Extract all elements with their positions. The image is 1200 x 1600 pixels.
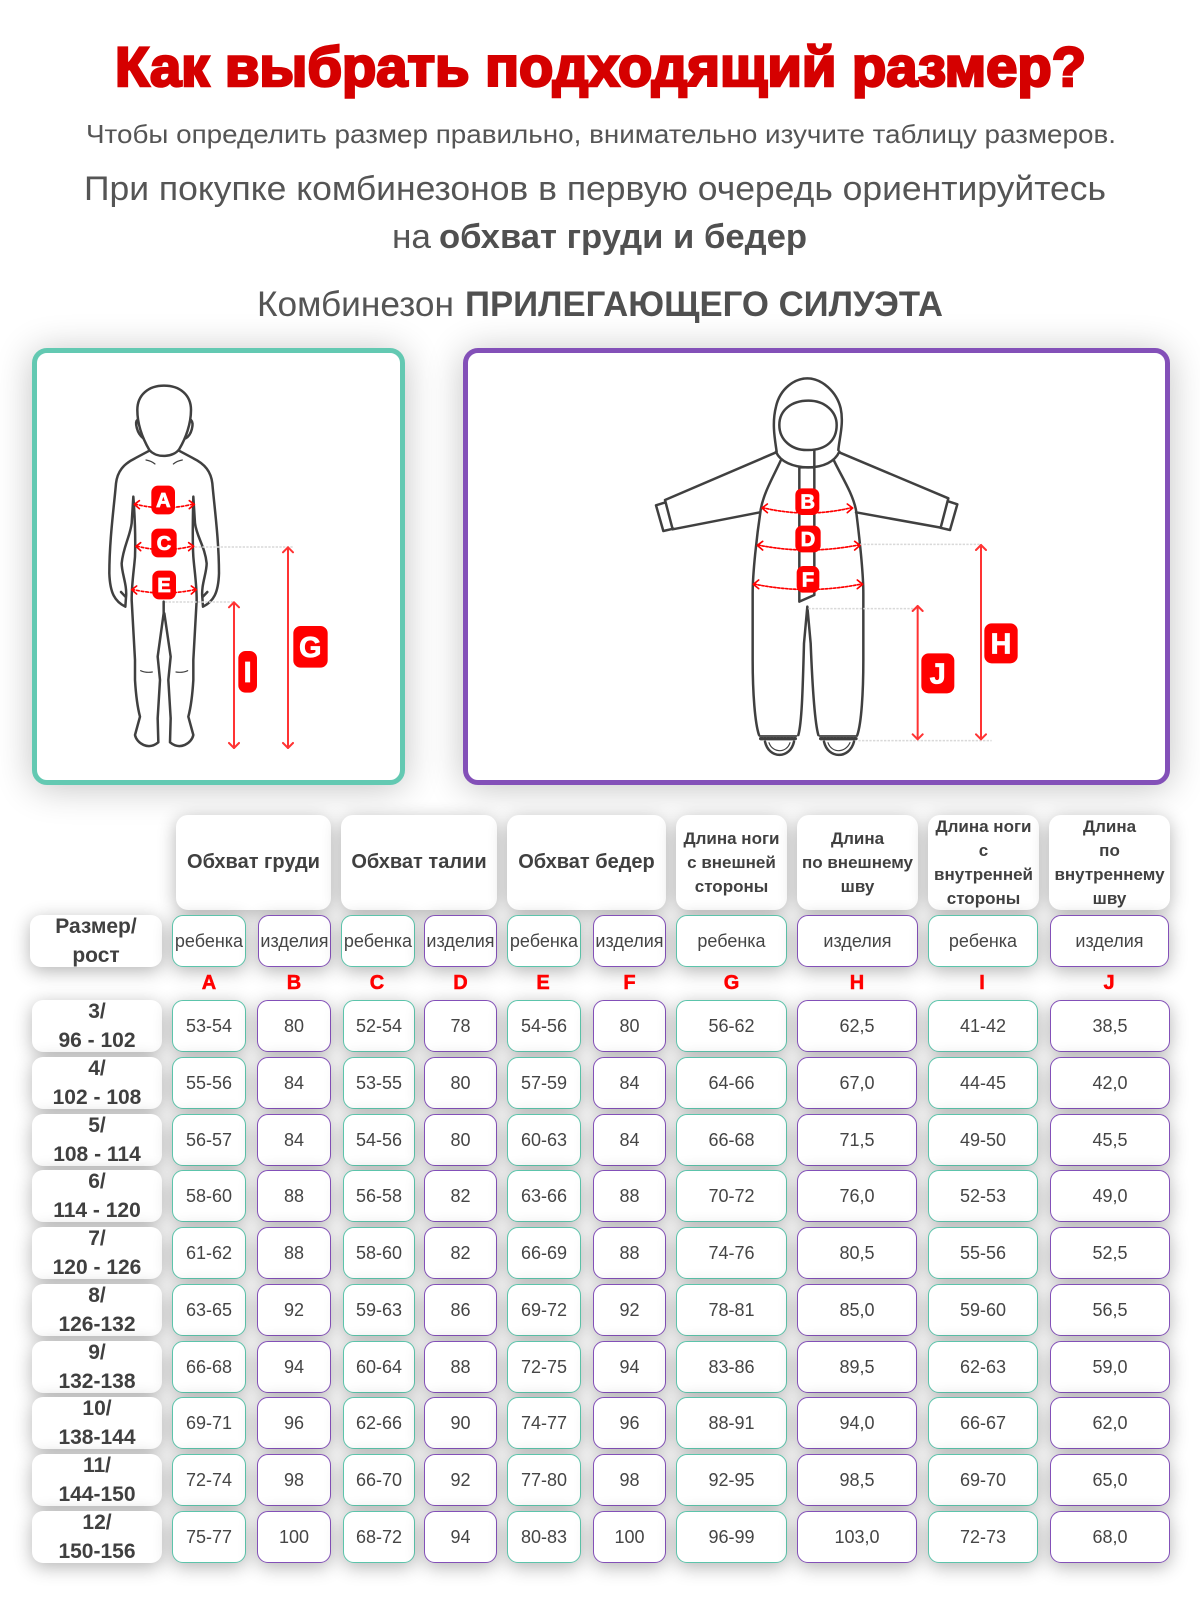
row: size 5: 84 <box>284 1130 304 1150</box>
row: size 5 <box>22 1108 1180 1563</box>
section heading: Комбинезон <box>257 285 454 324</box>
row: child / garment subheaders: изделия <box>595 930 664 950</box>
badge: E: E <box>157 575 171 597</box>
badge: I: I <box>244 657 252 689</box>
row: size 7: 58-60 <box>356 1242 402 1262</box>
badge: H <box>984 623 1018 663</box>
panel: jumpsuit garment measurements <box>463 348 1170 785</box>
row: size 10: 10/ <box>82 1397 112 1420</box>
header: leg length inner side: Длина ноги <box>936 816 1032 836</box>
row: child / garment subheaders: изделия <box>823 930 892 950</box>
badge: B <box>795 488 819 515</box>
row: size 10: 88-91 <box>708 1412 755 1432</box>
badge: A: A <box>156 490 171 512</box>
row: child / garment subheaders: ребенка <box>510 930 578 950</box>
row: size 8: 59-63 <box>356 1300 402 1320</box>
arrows: chest, waist, hip girth <box>753 504 863 589</box>
row: size 10: 62,0 <box>1092 1412 1128 1432</box>
badge: D <box>795 526 821 552</box>
row: size 8: 86 <box>450 1300 471 1320</box>
row: size 4: 102 - 108 <box>53 1086 141 1109</box>
row: size 6: 58-60 <box>186 1186 232 1206</box>
row: size 11: 98,5 <box>839 1470 875 1490</box>
row: size 10: 96 <box>619 1412 640 1432</box>
row: column letters: J <box>1103 972 1115 994</box>
row: size 8 <box>22 1278 1180 1563</box>
row: size 4 <box>22 1050 1180 1563</box>
row: size 9: 88 <box>450 1356 471 1376</box>
row: size 7: 61-62 <box>186 1242 232 1262</box>
icon: child body outline <box>109 386 219 746</box>
badge: I <box>238 651 257 693</box>
row: size 9: 9/ <box>88 1341 106 1364</box>
row: size 4: 84 <box>619 1072 640 1092</box>
row: size 11: 98 <box>284 1470 304 1490</box>
row: size 6: 88 <box>619 1186 640 1206</box>
row: size 7: 55-56 <box>960 1242 1006 1262</box>
badge: D: D <box>801 529 815 551</box>
icon: hooded jumpsuit outline <box>656 378 957 755</box>
arrow: measure H <box>976 545 986 739</box>
badge: E <box>152 571 176 599</box>
row: size 11: 144-150 <box>58 1483 136 1506</box>
row: size 5: 66-68 <box>708 1130 755 1150</box>
row: size 3 <box>22 994 1180 1563</box>
row: child / garment subheaders: изделия <box>260 930 329 950</box>
row: size 7: 52,5 <box>1092 1242 1128 1262</box>
row: size 8: 69-72 <box>521 1300 567 1320</box>
row: size 5: 60-63 <box>521 1130 567 1150</box>
row: size 4: 84 <box>284 1072 304 1092</box>
row: size 5: 56-57 <box>186 1130 232 1150</box>
row: size 10: 66-67 <box>960 1412 1006 1432</box>
row: size 5: 84 <box>619 1130 640 1150</box>
section heading <box>257 285 943 324</box>
row: child / garment subheaders: изделия <box>1075 930 1144 950</box>
row: size 5: 71,5 <box>839 1130 875 1150</box>
advice line 2: на <box>392 218 431 256</box>
header: chest girth: Обхват груди <box>187 851 320 873</box>
row: size 9 <box>22 1334 1180 1563</box>
header: outer seam length: по внешнему <box>802 852 913 872</box>
row: size 9: 60-64 <box>356 1356 402 1376</box>
row: size 6: 88 <box>284 1186 304 1206</box>
row: size 6: 114 - 120 <box>53 1199 141 1222</box>
header: leg length inner side: с <box>979 840 988 860</box>
row: size 10 <box>22 1390 1180 1563</box>
row: size 4: 57-59 <box>521 1072 567 1092</box>
row: size 9: 89,5 <box>839 1356 875 1376</box>
row: size 8: 59-60 <box>960 1300 1006 1320</box>
header: leg length outer side <box>676 815 787 910</box>
header: leg length inner side <box>928 815 1039 910</box>
row: size 4: 67,0 <box>839 1072 875 1092</box>
header: hip girth <box>507 815 666 910</box>
row: size 4: 55-56 <box>186 1072 232 1092</box>
row: size 8: 85,0 <box>839 1300 875 1320</box>
title: Как выбрать подходящий размер? <box>115 35 1086 98</box>
row: size 4: 53-55 <box>356 1072 402 1092</box>
row: size 11: 65,0 <box>1092 1470 1128 1490</box>
row: size 3: 80 <box>284 1016 304 1036</box>
row: size 4: 4/ <box>88 1057 106 1080</box>
row: size 9: 62-63 <box>960 1356 1006 1376</box>
row: child / garment subheaders: ребенка <box>175 930 243 950</box>
row: size 5: 80 <box>450 1130 471 1150</box>
guide lines: dotted levels <box>165 547 293 602</box>
table: size chart <box>20 808 1180 1578</box>
badge: J: J <box>930 659 946 691</box>
panel: child body measurements <box>32 348 405 785</box>
row: size 4: 44-45 <box>960 1072 1006 1092</box>
row: column letters: I <box>979 972 985 994</box>
row: size 9: 132-138 <box>58 1370 136 1393</box>
row: size 5: 54-56 <box>356 1130 402 1150</box>
row: size 11 <box>22 1448 1180 1563</box>
row: size 5: 5/ <box>88 1114 106 1137</box>
row: column letters: A <box>202 972 216 994</box>
row: size 3: 53-54 <box>186 1016 232 1036</box>
row: size 3: 54-56 <box>521 1016 567 1036</box>
badge: B: B <box>800 492 815 514</box>
row: size 9: 94 <box>619 1356 640 1376</box>
header: leg length outer side: с внешней <box>687 852 776 872</box>
row: size 12: 68,0 <box>1092 1526 1128 1546</box>
header: inner seam length: Длина <box>1083 816 1136 836</box>
row: size 7: 88 <box>619 1242 640 1262</box>
intro line: Чтобы определить размер правильно, внимательно изучите таблицу размеров. <box>86 119 1116 149</box>
row: column letters: B <box>287 972 301 994</box>
header: chest girth <box>176 815 331 910</box>
row: size 6: 56-58 <box>356 1186 402 1206</box>
row: size 12: 68-72 <box>356 1526 402 1546</box>
row: size 11: 11/ <box>83 1454 111 1477</box>
row: size 12: 150-156 <box>58 1540 136 1563</box>
row: size 3: 56-62 <box>708 1016 755 1036</box>
badge: G: G <box>299 632 321 664</box>
badge: A <box>151 486 175 514</box>
row: column letters: E <box>536 972 550 994</box>
row: child / garment subheaders: рост <box>72 944 120 967</box>
row: size 7: 80,5 <box>839 1242 875 1262</box>
row: size 8: 56,5 <box>1092 1300 1128 1320</box>
row: size 12: 75-77 <box>186 1526 232 1546</box>
row: size 10: 94,0 <box>839 1412 875 1432</box>
header: leg length outer side: Длина ноги <box>684 828 780 848</box>
row: size 7: 7/ <box>88 1227 106 1250</box>
row: size 4: 80 <box>450 1072 471 1092</box>
row: size 7: 82 <box>450 1242 471 1262</box>
row: child / garment subheaders: ребенка <box>949 930 1017 950</box>
row: child / garment subheaders <box>20 908 1180 1563</box>
heading block <box>84 35 1116 324</box>
row: size 12: 103,0 <box>834 1526 880 1546</box>
arrow: measure I <box>229 602 239 748</box>
row: size 8: 126-132 <box>58 1313 136 1336</box>
advice line 1: При покупке комбинезонов в первую очередь ориентируйтесь <box>84 170 1106 208</box>
row: size 3: 62,5 <box>839 1016 875 1036</box>
row: size 6: 76,0 <box>839 1186 875 1206</box>
row: size 11: 72-74 <box>186 1470 232 1490</box>
row: size 9: 72-75 <box>521 1356 567 1376</box>
row: size 6: 63-66 <box>521 1186 567 1206</box>
arrow: measure G <box>283 547 293 748</box>
badge: H: H <box>991 629 1011 661</box>
row: size 3: 52-54 <box>356 1016 402 1036</box>
badge: F: F <box>802 569 814 591</box>
row: size 11: 92 <box>450 1470 471 1490</box>
badge: C: C <box>157 533 171 555</box>
row: size 7 <box>22 1220 1180 1563</box>
guide lines: dotted levels <box>808 544 992 741</box>
header: outer seam length: шву <box>841 876 874 896</box>
row: size 9: 94 <box>284 1356 304 1376</box>
header: inner seam length: внутреннему <box>1054 864 1165 884</box>
row: child / garment subheaders: Размер/ <box>55 915 137 938</box>
row: size 6: 49,0 <box>1092 1186 1128 1206</box>
row: size 8: 78-81 <box>708 1300 755 1320</box>
row: size 3: 41-42 <box>960 1016 1006 1036</box>
row: size 3: 96 - 102 <box>58 1029 136 1052</box>
arrows: chest, waist, hip girth <box>132 501 196 594</box>
badge: J <box>921 653 954 693</box>
row: size 4: 64-66 <box>708 1072 755 1092</box>
row: size 12: 100 <box>279 1526 309 1546</box>
row: size 12 <box>22 1504 1180 1578</box>
header: inner seam length: шву <box>1093 888 1126 908</box>
row: size 8: 8/ <box>88 1284 106 1307</box>
row: child / garment subheaders: ребенка <box>344 930 412 950</box>
row: size 11: 69-70 <box>960 1470 1006 1490</box>
row: size 10: 69-71 <box>186 1412 232 1432</box>
row: size 11: 98 <box>619 1470 640 1490</box>
row: size 6: 52-53 <box>960 1186 1006 1206</box>
header: waist girth <box>341 815 497 910</box>
row: size 7: 120 - 126 <box>53 1256 141 1279</box>
row: size 9: 59,0 <box>1092 1356 1128 1376</box>
row: size 6: 6/ <box>88 1170 106 1193</box>
row: column letters: C <box>370 972 384 994</box>
row: column letters: H <box>850 972 864 994</box>
row: size 10: 138-144 <box>58 1426 136 1449</box>
header: waist girth: Обхват талии <box>351 851 487 873</box>
header: leg length inner side: внутренней <box>934 864 1033 884</box>
badge: F <box>797 566 819 593</box>
row: size 3: 38,5 <box>1092 1016 1128 1036</box>
row: size 11: 66-70 <box>356 1470 402 1490</box>
row: size 3: 78 <box>450 1016 471 1036</box>
row: size 7: 88 <box>284 1242 304 1262</box>
row: size 5: 45,5 <box>1092 1130 1128 1150</box>
row: size 5: 108 - 114 <box>53 1143 141 1166</box>
header: inner seam length <box>1049 815 1170 910</box>
row: size 5: 49-50 <box>960 1130 1006 1150</box>
row: size 3: 3/ <box>88 1000 106 1023</box>
row: column letters: G <box>724 972 739 994</box>
row: size 7: 74-76 <box>708 1242 755 1262</box>
section heading: ПРИЛЕГАЮЩЕГО СИЛУЭТА <box>465 285 943 324</box>
row: column letters: D <box>453 972 468 994</box>
header: leg length outer side: стороны <box>695 876 768 896</box>
row: size 10: 90 <box>450 1412 471 1432</box>
badge: C <box>151 529 177 557</box>
row: size 9: 66-68 <box>186 1356 232 1376</box>
header: inner seam length: по <box>1099 840 1120 860</box>
row: size 12: 12/ <box>82 1511 112 1534</box>
badge: G <box>293 626 328 668</box>
row: size 10: 96 <box>284 1412 304 1432</box>
row: column letters <box>202 972 1115 994</box>
header: leg length inner side: стороны <box>947 888 1020 908</box>
row: size 8: 63-65 <box>186 1300 232 1320</box>
header: hip girth: Обхват бедер <box>518 851 655 873</box>
row: size 12: 72-73 <box>960 1526 1006 1546</box>
row: size 6: 82 <box>450 1186 471 1206</box>
row: size 3: 80 <box>619 1016 640 1036</box>
row: size 10: 62-66 <box>356 1412 402 1432</box>
row: size 12: 100 <box>614 1526 645 1546</box>
advice line 2: обхват груди и бедер <box>439 218 807 256</box>
arrow: measure J <box>913 606 923 739</box>
row: size 6: 70-72 <box>708 1186 755 1206</box>
row: size 11: 92-95 <box>708 1470 755 1490</box>
row: child / garment subheaders: ребенка <box>697 930 766 950</box>
row: size 8: 92 <box>284 1300 304 1320</box>
row: size 12: 94 <box>450 1526 471 1546</box>
row: column letters: F <box>623 972 636 994</box>
row: size 8: 92 <box>619 1300 640 1320</box>
row: size 6 <box>22 1164 1180 1563</box>
row: size 4: 42,0 <box>1092 1072 1128 1092</box>
row: size 9: 83-86 <box>708 1356 755 1376</box>
row: size 12: 96-99 <box>708 1526 755 1546</box>
row: size 10: 74-77 <box>521 1412 567 1432</box>
row: size 12: 80-83 <box>521 1526 567 1546</box>
row: child / garment subheaders: изделия <box>426 930 495 950</box>
row: size 11: 77-80 <box>521 1470 567 1490</box>
row: size 7: 66-69 <box>521 1242 567 1262</box>
header: outer seam length: Длина <box>831 828 884 848</box>
header: outer seam length <box>797 815 918 910</box>
